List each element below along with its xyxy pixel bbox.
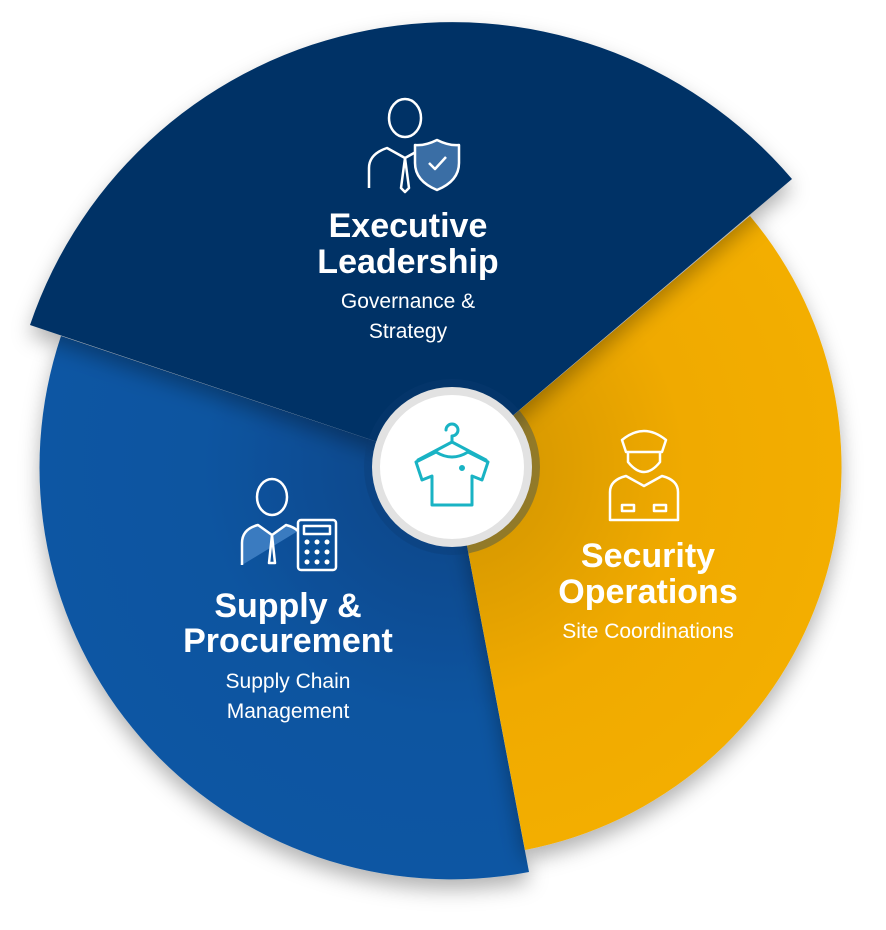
heading: supply and procurement: Supply &: [214, 587, 362, 625]
heading: security operations: Security: [581, 537, 715, 575]
heading: security operations: Operations: [558, 573, 738, 611]
center circle: [364, 379, 540, 555]
heading: supply and procurement: Management: [227, 700, 349, 723]
heading: security operations: Site Coordinations: [562, 620, 734, 643]
icon: shirt on hanger: [416, 424, 488, 505]
heading: supply and procurement: Supply Chain: [226, 670, 350, 693]
heading: executive leadership: Leadership: [317, 243, 499, 281]
icon: security guard: [610, 431, 678, 520]
panel: security operations segment: [452, 216, 841, 850]
heading: security operations: [558, 537, 738, 643]
heading: supply and procurement: [183, 587, 393, 723]
heading: executive leadership: Executive: [329, 207, 487, 245]
panel: supply and procurement segment: [39, 336, 529, 879]
panel: executive leadership segment: [30, 22, 792, 467]
icon: procurement person with calculator: [242, 479, 336, 570]
heading: executive leadership: Governance &: [341, 290, 475, 313]
heading: executive leadership: [317, 207, 499, 343]
heading: executive leadership: Strategy: [369, 320, 448, 343]
icon: executive with shield: [369, 99, 459, 192]
heading: supply and procurement: Procurement: [183, 622, 393, 660]
